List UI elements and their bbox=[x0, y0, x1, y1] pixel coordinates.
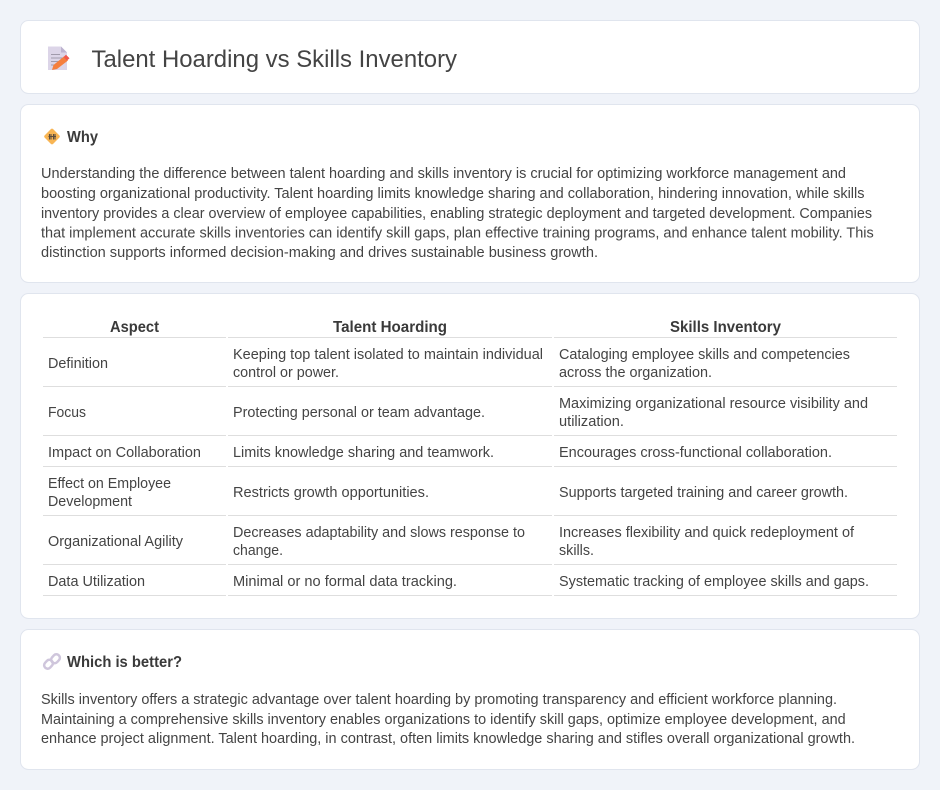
row: organizational agility: skills. bbox=[559, 543, 594, 559]
table header row bbox=[110, 319, 781, 336]
row: definition: Keeping top talent isolated to maintain individual bbox=[233, 347, 543, 363]
text block: why body: Understanding the difference between talent hoarding and skills inventory is crucial for optimizing workforce management and bbox=[41, 166, 846, 182]
text block: which is better body bbox=[41, 692, 855, 747]
row: definition: across the organization. bbox=[559, 365, 712, 381]
table header row: Aspect bbox=[110, 319, 160, 336]
row: focus bbox=[48, 396, 868, 430]
text block: which is better body: enhance project alignment. Talent hoarding, in contrast, often limits knowledge sharing and stifles overall organizational growth. bbox=[41, 731, 855, 747]
row: definition: Definition bbox=[48, 356, 108, 372]
row: organizational agility: Increases flexibility and quick redeployment of bbox=[559, 525, 855, 541]
row: organizational agility: change. bbox=[233, 543, 283, 559]
table header row: Talent Hoarding bbox=[333, 319, 447, 336]
row: focus: utilization. bbox=[559, 414, 624, 430]
row: focus: Protecting personal or team advantage. bbox=[233, 405, 485, 421]
row: effect on employee development bbox=[48, 476, 848, 510]
row: impact on collaboration bbox=[48, 445, 832, 461]
row: effect on employee development: Supports targeted training and career growth. bbox=[559, 485, 848, 501]
table header row: Skills Inventory bbox=[670, 319, 781, 336]
row: effect on employee development: Effect on Employee bbox=[48, 476, 171, 492]
text block: which is better body: Skills inventory offers a strategic advantage over talent hoarding by promoting transparency and efficient workforce planning. bbox=[41, 692, 837, 708]
heading: which is better: Which is better? bbox=[67, 654, 182, 671]
text block: why body: inventory provides a clear overview of employee capabilities, enabling strategic deployment and targeted development. Companies bbox=[41, 206, 872, 222]
table rules bbox=[43, 337, 897, 596]
title: Talent Hoarding vs Skills Inventory bbox=[92, 46, 458, 73]
text block: why body: that implement accurate skills inventories can identify skill gaps, plan effective training programs, and enhance talent mobility. This bbox=[41, 226, 874, 242]
row: data utilization bbox=[48, 574, 869, 590]
row: impact on collaboration: Impact on Collaboration bbox=[48, 445, 201, 461]
row: organizational agility: Organizational Agility bbox=[48, 534, 184, 550]
icon: memo with pencil bbox=[48, 46, 70, 70]
row: effect on employee development: Development bbox=[48, 494, 132, 510]
icon: orange warning diamond bbox=[44, 128, 60, 145]
text block: why body: boosting organizational productivity. Talent hoarding limits knowledge sharing and collaboration, hindering innovation, while skills bbox=[41, 186, 864, 202]
icon: chain link bbox=[43, 653, 61, 670]
text block: which is better body: Maintaining a comprehensive skills inventory enables organizations to identify skill gaps, optimize employee development, and bbox=[41, 712, 846, 728]
row: effect on employee development: Restricts growth opportunities. bbox=[233, 485, 429, 501]
row: focus: Focus bbox=[48, 405, 86, 421]
heading: why: Why bbox=[67, 129, 98, 146]
text block: why body: distinction supports informed decision-making and drives sustainable business growth. bbox=[41, 245, 598, 261]
row: definition: Cataloging employee skills and competencies bbox=[559, 347, 850, 363]
panel: why bbox=[20, 104, 920, 282]
panel: comparison table bbox=[20, 294, 920, 618]
row: impact on collaboration: Limits knowledge sharing and teamwork. bbox=[233, 445, 494, 461]
panel: which is better bbox=[20, 630, 920, 770]
row: organizational agility bbox=[48, 525, 855, 559]
row: impact on collaboration: Encourages cross-functional collaboration. bbox=[559, 445, 832, 461]
row: definition: control or power. bbox=[233, 365, 339, 381]
row: data utilization: Data Utilization bbox=[48, 574, 145, 590]
row: focus: Maximizing organizational resource visibility and bbox=[559, 396, 868, 412]
text block: why body bbox=[41, 166, 874, 261]
row: organizational agility: Decreases adaptability and slows response to bbox=[233, 525, 525, 541]
row: data utilization: Minimal or no formal data tracking. bbox=[233, 574, 457, 590]
row: data utilization: Systematic tracking of employee skills and gaps. bbox=[559, 574, 869, 590]
panel: title header bbox=[20, 20, 920, 94]
row: definition bbox=[48, 347, 850, 381]
